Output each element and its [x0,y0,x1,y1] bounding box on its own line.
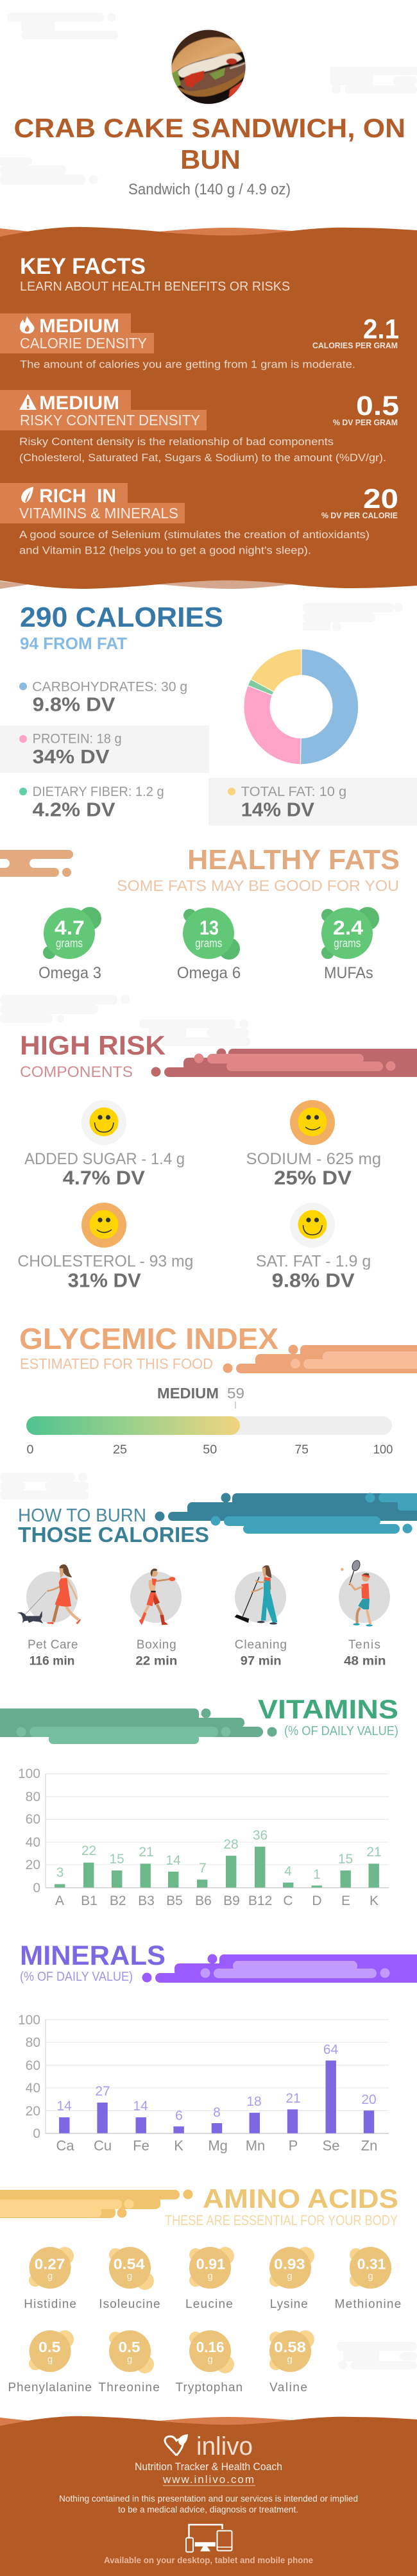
amino: histidine: 0.27 [35,2255,65,2272]
amino: valine: 0.58 [274,2339,306,2355]
bar chart: minerals: K [174,2138,183,2154]
bar chart: vitamins: B1 [81,1894,98,1908]
badge: MUFAs: MUFAs [324,964,373,982]
amino: methionine: g [368,2271,373,2282]
bar chart: vitamins: 15 [109,1852,124,1867]
bar chart: vitamins: B3 [138,1894,155,1908]
bar chart: minerals: Mn [246,2138,265,2154]
stat: carbohydrates [19,679,187,716]
activity: tennis: Tenis [348,1638,380,1652]
bar chart: minerals: 64 [323,2042,338,2057]
minerals subheading: (% OF DAILY VALUE) [20,1969,133,1984]
gauge bar [26,1416,392,1435]
bar chart: vitamins: 1 [313,1867,321,1882]
stat: dietary fiber: DIETARY FIBER: 1.2 g [33,784,164,799]
bar chart: vitamins: B5 [166,1894,183,1908]
amino: valine: g [287,2354,293,2365]
bar chart: minerals: 20 [26,2104,40,2119]
panel: glycemic index [19,1322,417,1457]
amino: histidine: Histidine [24,2298,76,2311]
bar chart: vitamins: B9 [223,1894,240,1908]
bar chart: vitamins: 80 [26,1790,40,1804]
activity: cleaning: Cleaning [235,1638,287,1652]
activity: tennis: 48 min [344,1655,386,1668]
bar chart: minerals: 6 [175,2108,183,2123]
panel: calories [0,602,417,826]
bar chart: vitamins: 3 [56,1865,64,1880]
bar chart: vitamins: 15 [338,1852,353,1867]
amino: tryptophan: Tryptophan [176,2381,243,2394]
bar chart: minerals: Ca [56,2138,74,2154]
amino: methionine: 0.31 [357,2255,386,2272]
amino: threonine: g [127,2354,132,2365]
risk: cholesterol: CHOLESTEROL - 93 mg [17,1252,193,1270]
risky content value: % DV PER GRAM [333,418,398,427]
risky content description: (Cholesterol, Saturated Fat, Sugars & Sodium) to the amount (%DV/gr). [19,452,386,464]
bar chart: vitamins: 100 [18,1767,40,1781]
key facts heading: KEY FACTS [20,254,146,279]
badge: omega 6: grams [195,937,222,950]
activity: pet care: 116 min [30,1655,74,1668]
icon: warning triangle [19,394,37,410]
risky content value: 0.5 [356,391,399,421]
gauge scale: 25 [113,1443,127,1457]
panel: how to burn those calories [17,1493,417,1668]
amino: threonine: 0.5 [118,2339,140,2355]
risk: cholesterol: 31% DV [68,1269,141,1292]
bar chart: vitamins: 40 [26,1835,40,1850]
amino: histidine: g [47,2271,53,2282]
amino: isoleucine [99,2247,160,2311]
bar chart: vitamins: A [55,1894,64,1908]
calorie density value: CALORIES PER GRAM [312,341,398,350]
bar chart: vitamins: 7 [199,1861,207,1876]
donut chart [244,649,359,765]
amino: leucine: 0.91 [196,2255,225,2272]
vitamins and minerals description [19,529,370,557]
bar chart: minerals: 100 [18,2013,40,2028]
activity: cleaning: 97 min [241,1655,282,1668]
risky content label: MEDIUM [39,393,119,414]
risky content description [19,436,386,464]
bar chart: minerals: 60 [26,2058,40,2073]
disclaimer: to be a medical advice, diagnosis or treatment. [118,2504,298,2514]
bar chart: vitamins: 14 [166,1853,181,1868]
food photo: sandwich [170,28,247,105]
header bar decoration [223,1344,417,1373]
burn heading [18,1505,209,1547]
activity: pet care [17,1564,81,1668]
website link: www.inlivo.com [162,2473,254,2486]
panel: key facts [0,227,417,589]
stat: protein [0,725,209,773]
risk: added sugar: 4.7% DV [63,1167,145,1189]
bar chart: vitamins: B6 [195,1894,212,1908]
bar chart: vitamins: 21 [139,1845,154,1860]
amino: threonine: Threonine [98,2381,160,2394]
glycemic index heading: GLYCEMIC INDEX [19,1322,278,1355]
bar chart: vitamins: 0 [33,1881,40,1895]
panel: amino acids [0,2183,401,2394]
stat: total fat: 14% DV [241,799,314,821]
bar chart: vitamins: 20 [26,1858,40,1872]
tagline: Nutrition Tracker & Health Coach [135,2461,282,2473]
gauge value: MEDIUM [157,1385,219,1402]
vitamins and minerals label: VITAMINS & MINERALS [19,505,178,521]
gauge value [157,1385,244,1409]
amino: leucine [185,2247,234,2311]
bar chart: minerals: 0 [33,2126,40,2141]
header bar decoration [155,1493,417,1534]
vitamins and minerals value [321,484,398,520]
risk: added sugar: ADDED SUGAR - 1.4 g [24,1150,185,1168]
bar chart: minerals: Fe [133,2138,149,2154]
amino: methionine [335,2247,401,2311]
disclaimer: Nothing contained in this presentation and our services is intended or implied [59,2493,358,2504]
calorie density value [312,314,399,350]
badge: omega 6: 13 [200,916,219,939]
calorie density label: MEDIUM [39,316,119,337]
gauge scale: 0 [27,1443,33,1457]
stat: dietary fiber: 4.2% DV [33,799,115,821]
gauge scale: 75 [294,1443,309,1457]
amino: lysine: 0.93 [274,2255,305,2272]
vitamins and minerals value: % DV PER CALORIE [321,511,398,520]
bar chart: minerals: Mg [208,2138,228,2154]
badge: MUFAs: 2.4 [333,916,364,939]
bar chart: minerals: Cu [94,2138,112,2154]
logo: heart and leaf [165,2434,188,2455]
bar chart: minerals: Se [323,2138,339,2154]
amino: methionine: Methionine [335,2298,401,2311]
risk: sodium: 25% DV [274,1167,352,1189]
stat: total fat [208,778,417,826]
bar chart: minerals: 18 [246,2094,262,2109]
amino: tryptophan: 0.16 [196,2339,225,2355]
amino: tryptophan [176,2330,243,2394]
risky content description: Risky Content density is the relationship of bad components [19,436,334,448]
burn heading: THOSE CALORIES [18,1523,209,1547]
amino: isoleucine: 0.54 [114,2255,145,2272]
amino: leucine: g [207,2271,213,2282]
minerals heading: MINERALS [20,1940,166,1971]
stat: total fat: TOTAL FAT: 10 g [241,784,346,799]
activity: boxing: 22 min [135,1655,177,1668]
amino: phenylalanine [8,2330,92,2394]
bar chart: minerals: 20 [361,2092,377,2107]
high risk subheading: COMPONENTS [20,1063,133,1081]
bar chart: minerals: 14 [56,2099,72,2114]
bar chart: vitamins: B12 [248,1894,272,1908]
gauge scale [27,1443,393,1457]
healthy fats heading: HEALTHY FATS [187,845,400,876]
bar chart: minerals [18,2013,389,2154]
icon: devices [186,2525,232,2552]
panel: footer [0,2416,417,2576]
high risk heading: HIGH RISK [20,1030,166,1060]
gauge value: 59 [227,1385,244,1402]
bar chart: minerals: P [289,2138,298,2154]
bar chart: minerals: 21 [285,2091,301,2106]
activity: pet care: Pet Care [28,1638,78,1652]
vitamins and minerals description: A good source of Selenium (stimulates the creation of antioxidants) [19,529,370,541]
bar chart: vitamins: C [283,1894,293,1908]
risky content label [0,390,207,430]
bar chart: vitamins: E [341,1894,350,1908]
bar chart: vitamins: 28 [223,1837,239,1852]
bar chart: minerals: 14 [133,2099,148,2114]
risk: cholesterol [17,1203,193,1292]
serving size subtitle: Sandwich (140 g / 4.9 oz) [128,181,291,198]
logo wordmark: inlivo [196,2432,253,2461]
amino: phenylalanine: g [47,2354,53,2365]
vitamins and minerals description: and Vitamin B12 (helps you to get a good night's sleep). [19,544,311,557]
bar chart: minerals: 8 [213,2105,221,2120]
vitamins heading: VITAMINS [258,1694,398,1724]
risk: sodium: SODIUM - 625 mg [246,1150,381,1168]
gauge scale: 50 [203,1443,217,1457]
header bar decoration [142,1954,417,1983]
activity: boxing [130,1568,182,1668]
amino: isoleucine: Isoleucine [99,2298,160,2311]
risk: saturated fat: SAT. FAT - 1.9 g [256,1252,371,1270]
bar chart: vitamins: 4 [284,1864,292,1879]
bar chart: minerals: Zn [361,2138,377,2154]
stat: carbohydrates: CARBOHYDRATES: 30 g [32,679,187,694]
amino: lysine: g [287,2271,293,2282]
bar chart: vitamins: 36 [253,1828,268,1843]
bar chart: minerals: 80 [26,2035,40,2050]
bar chart: vitamins: 22 [81,1843,96,1858]
badge: omega 6: Omega 6 [177,964,241,982]
amino: valine: Valine [269,2381,307,2394]
bar chart: vitamins: B2 [110,1894,126,1908]
calorie density value: 2.1 [363,314,399,345]
burn heading: HOW TO BURN [18,1505,146,1526]
risky content label: RISKY CONTENT DENSITY [20,412,200,428]
amino: valine [269,2330,314,2394]
panel: high risk components [17,1030,417,1292]
bar chart: minerals: 40 [26,2081,40,2096]
icon: leaf [21,487,33,503]
glycemic index subheading: ESTIMATED FOR THIS FOOD [20,1355,213,1372]
badge: omega 6 [177,908,241,982]
badge: omega 3: Omega 3 [38,964,101,982]
calorie density label: CALORIE DENSITY [20,335,147,352]
amino: phenylalanine: 0.5 [38,2339,61,2355]
vitamins subheading: (% OF DAILY VALUE) [284,1724,398,1738]
header bar decoration [0,2190,192,2218]
bar chart: vitamins: K [370,1894,379,1908]
stat: dietary fiber [19,784,164,821]
amino acids heading: AMINO ACIDS [203,2183,398,2214]
bar chart: vitamins [18,1767,389,1908]
bar chart: vitamins: 60 [26,1812,40,1827]
risk: sodium [246,1100,381,1189]
badge: omega 3 [38,907,101,982]
risky content value [333,391,399,427]
activity: cleaning [235,1565,287,1668]
panel: minerals [18,1940,417,2154]
badge: MUFAs [321,907,379,982]
stat: protein: PROTEIN: 18 g [33,732,122,747]
risk: saturated fat [256,1203,371,1292]
header bar decoration [151,1048,417,1077]
calories from fat: 94 FROM FAT [20,634,127,653]
calorie density description: The amount of calories you are getting from 1 gram is moderate. [20,358,355,371]
header bar decoration [0,1709,277,1744]
amino: tryptophan: g [207,2354,213,2365]
title [14,113,405,174]
risk: saturated fat: 9.8% DV [272,1269,355,1292]
availability note: Available on your desktop, tablet and mobile phone [104,2555,313,2565]
vitamins and minerals label [0,483,185,523]
risk: added sugar [24,1100,185,1189]
badge: MUFAs: grams [334,937,361,950]
panel: healthy fats [0,845,400,982]
title: CRAB CAKE SANDWICH, ON [14,113,405,143]
disclaimer [59,2493,358,2514]
header bar decoration [0,850,73,877]
amino: leucine: Leucine [185,2298,233,2311]
key facts subheading: LEARN ABOUT HEALTH BENEFITS OR RISKS [20,280,290,294]
vitamins and minerals value: 20 [363,484,398,514]
stat: protein: 34% DV [33,745,110,768]
panel: vitamins [0,1694,398,1908]
title: BUN [180,144,241,174]
badge: omega 3: grams [56,937,83,950]
vitamins and minerals label: RICH IN [39,486,116,507]
bar chart: minerals: 27 [95,2084,110,2099]
activity: tennis [339,1559,390,1668]
calories heading: 290 CALORIES [20,602,223,633]
amino: lysine [269,2247,314,2311]
healthy fats subheading: SOME FATS MAY BE GOOD FOR YOU [117,877,399,895]
stat: carbohydrates: 9.8% DV [33,693,115,716]
icon: flame [20,316,35,334]
gauge scale: 100 [373,1443,393,1457]
calorie density label [0,313,154,353]
bar chart: vitamins: D [312,1894,322,1908]
activity: boxing: Boxing [137,1638,176,1652]
amino: lysine: Lysine [270,2298,308,2311]
amino: histidine [24,2247,76,2311]
amino: threonine [98,2330,160,2394]
amino: phenylalanine: Phenylalanine [8,2381,92,2394]
bar chart: vitamins: 21 [366,1845,382,1860]
amino: isoleucine: g [127,2271,132,2282]
badge: omega 3: 4.7 [55,916,85,939]
